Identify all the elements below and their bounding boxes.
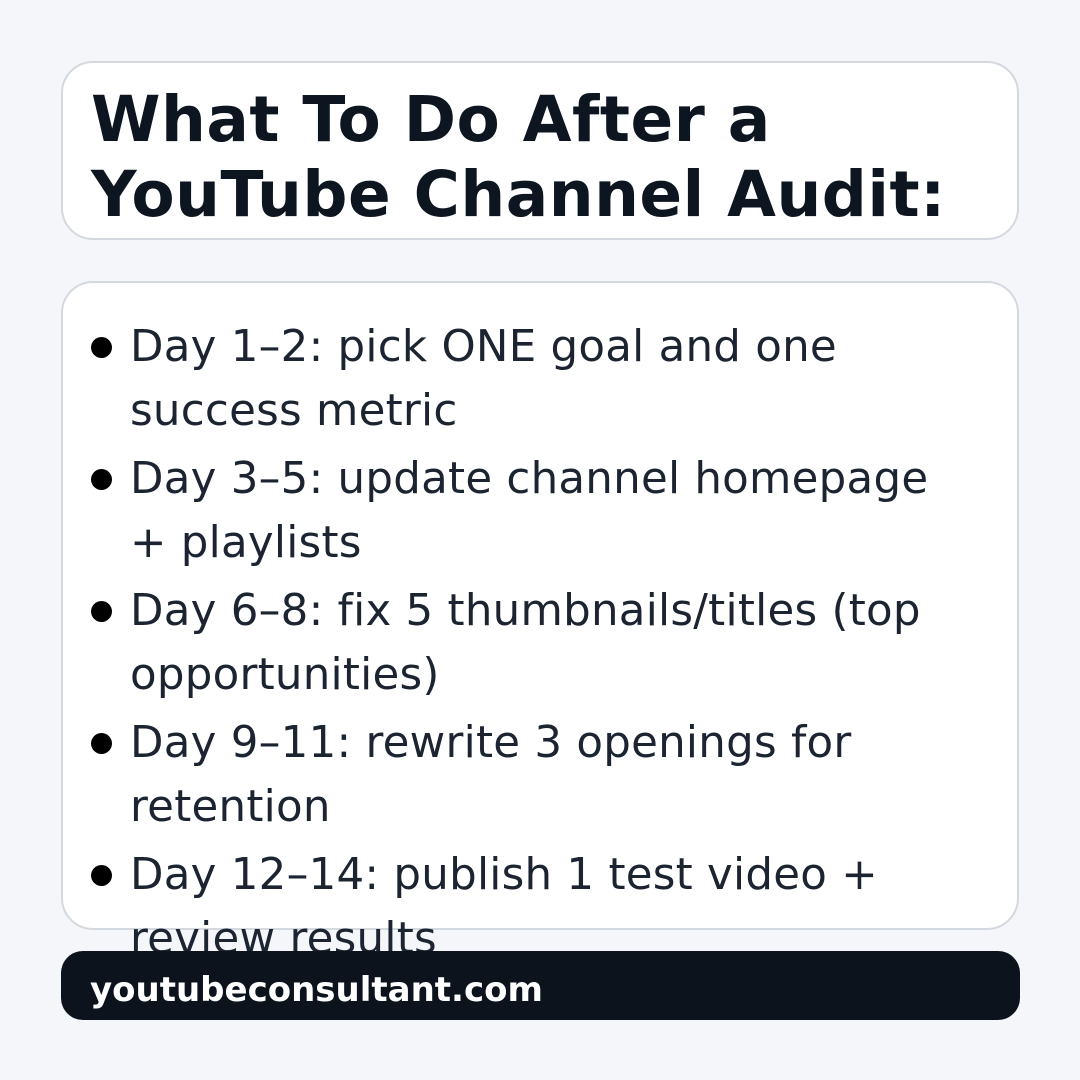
panel: action list	[61, 281, 1019, 930]
item: day 12-14: review results	[130, 914, 437, 964]
footer bar: youtubeconsultant.com	[90, 970, 543, 1010]
title heading: YouTube Channel Audit:	[91, 158, 946, 231]
item: day 6-8: Day 6–8: fix 5 thumbnails/titles (top	[130, 586, 921, 636]
item: day 1-2: success metric	[130, 386, 458, 436]
item: day 3-5	[91, 454, 928, 568]
item: day 3-5: + playlists	[130, 518, 362, 568]
item: day 1-2: Day 1–2: pick ONE goal and one	[130, 322, 837, 372]
title heading: What To Do After a	[91, 83, 771, 156]
item: day 6-8: opportunities)	[130, 650, 440, 700]
item: day 12-14	[91, 850, 878, 964]
item: day 9-11: retention	[130, 782, 331, 832]
item: day 1-2	[91, 322, 837, 436]
item: day 3-5: Day 3–5: update channel homepage	[130, 454, 928, 504]
item: day 9-11: Day 9–11: rewrite 3 openings for	[130, 718, 852, 768]
title heading	[90, 83, 946, 231]
item: day 6-8	[91, 586, 921, 700]
item: day 9-11	[91, 718, 852, 832]
item: day 12-14: Day 12–14: publish 1 test video +	[130, 850, 878, 900]
footer bar	[61, 951, 1020, 1020]
title card	[61, 61, 1019, 240]
